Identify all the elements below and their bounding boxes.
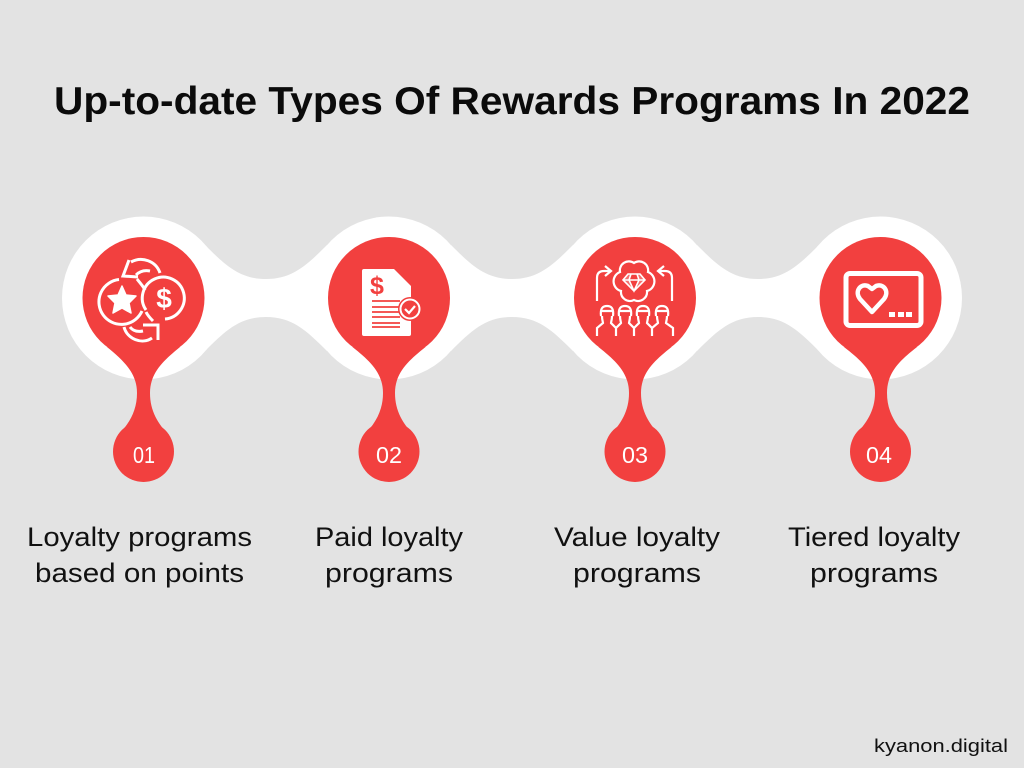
icon: value gem and community — [597, 261, 673, 336]
icon: heart loyalty card — [846, 274, 921, 326]
label: paid loyalty programs: Paid loyalty — [315, 522, 464, 552]
number 03: 03 — [622, 442, 648, 468]
number 01: 01 — [133, 442, 155, 468]
step 1 pin — [82, 237, 204, 482]
label: loyalty programs based on points — [27, 522, 252, 588]
number 04: 04 — [866, 442, 892, 468]
label: tiered loyalty programs: programs — [810, 558, 938, 588]
number 02: 02 — [376, 442, 402, 468]
label: loyalty programs based on points: Loyalty programs — [27, 522, 252, 552]
icon: paid document: $ — [370, 272, 384, 300]
step 2 pin — [328, 237, 450, 482]
icon: points and dollar coins — [99, 259, 184, 341]
step 3 pin — [574, 237, 696, 482]
label: paid loyalty programs: programs — [325, 558, 453, 588]
label: loyalty programs based on points: based on points — [35, 558, 244, 588]
label: value loyalty programs: programs — [573, 558, 701, 588]
label: tiered loyalty programs — [788, 522, 961, 588]
label: value loyalty programs — [554, 522, 721, 588]
title: Up-to-date Types Of Rewards Programs In 2022 — [54, 80, 970, 123]
white connecting band — [62, 216, 962, 380]
step 4 pin — [820, 237, 942, 482]
icon: points and dollar coins: $ — [156, 283, 172, 314]
brand credit: kyanon.digital — [874, 735, 1008, 756]
label: paid loyalty programs — [315, 522, 464, 588]
label: value loyalty programs: Value loyalty — [554, 522, 721, 552]
icon: paid document — [362, 269, 422, 336]
label: tiered loyalty programs: Tiered loyalty — [788, 522, 961, 552]
